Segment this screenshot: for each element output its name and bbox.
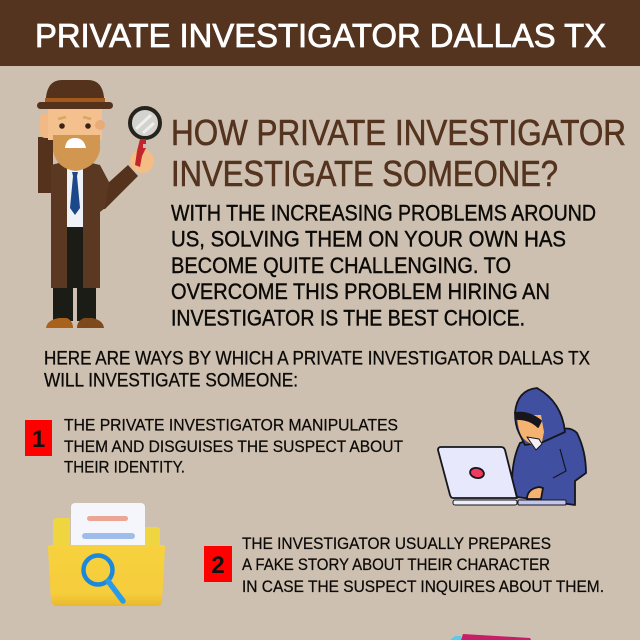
icon: detective with magnifying glass [37, 80, 160, 328]
step 2 text: IN CASE THE SUSPECT INQUIRES ABOUT THEM. [242, 577, 604, 596]
step 2 text: THE INVESTIGATOR USUALLY PREPARES [242, 534, 551, 553]
step 2 text [242, 534, 604, 596]
intro paragraph: OVERCOME THIS PROBLEM HIRING AN [171, 279, 550, 304]
intro paragraph: INVESTIGATOR IS THE BEST CHOICE. [171, 306, 525, 330]
intro paragraph [171, 200, 596, 330]
step 2 number badge [204, 546, 232, 582]
heading: INVESTIGATE SOMEONE? [171, 153, 558, 194]
lead-in text [44, 348, 590, 392]
step 1 text: THE PRIVATE INVESTIGATOR MANIPULATES [64, 416, 398, 434]
lead-in text: WILL INVESTIGATE SOMEONE: [44, 370, 298, 392]
step 1 text: THEM AND DISGUISES THE SUSPECT ABOUT [64, 437, 403, 456]
step 1 number badge: 1 [32, 426, 45, 453]
heading [171, 112, 626, 194]
step 1 text [64, 416, 403, 476]
step 2 number badge: 2 [211, 552, 225, 579]
step 1 number badge [25, 420, 52, 456]
intro paragraph: BECOME QUITE CHALLENGING. TO [171, 253, 511, 278]
intro paragraph: WITH THE INCREASING PROBLEMS AROUND [171, 200, 596, 226]
step 1 text: THEIR IDENTITY. [64, 458, 185, 476]
header banner [0, 0, 640, 66]
intro paragraph: US, SOLVING THEM ON YOUR OWN HAS [171, 226, 566, 252]
icon: yellow folder with magnifier [48, 503, 165, 606]
title: PRIVATE INVESTIGATOR DALLAS TX [35, 17, 606, 54]
icon: cropped next illustration [450, 634, 531, 640]
icon: hooded hacker at laptop [438, 388, 586, 505]
lead-in text: HERE ARE WAYS BY WHICH A PRIVATE INVESTIGATOR DALLAS TX [44, 348, 590, 370]
step 2 text: A FAKE STORY ABOUT THEIR CHARACTER [242, 555, 550, 574]
